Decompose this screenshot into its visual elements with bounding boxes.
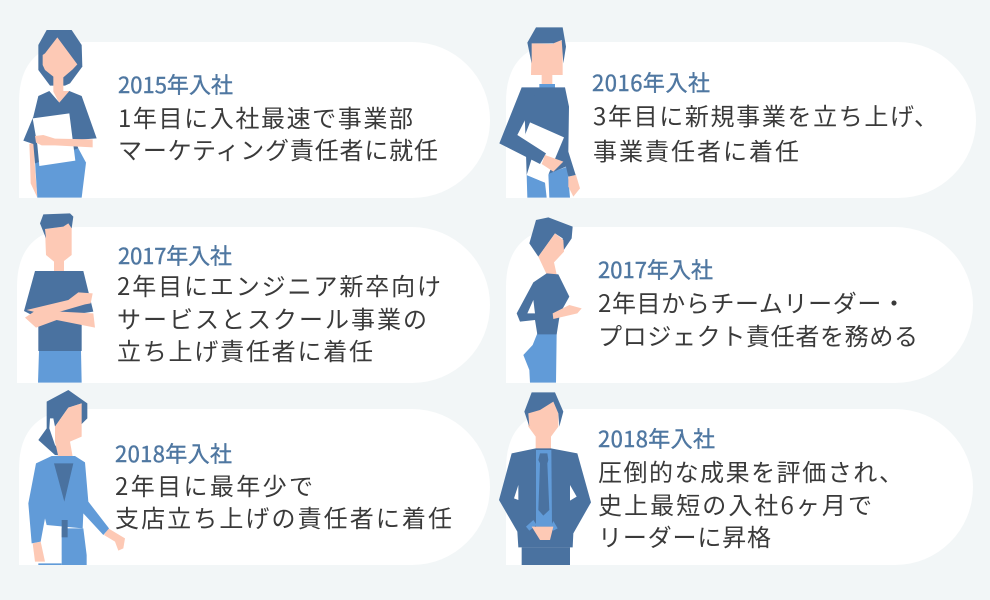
- text block: promotion achievement: [598, 453, 903, 553]
- text block: promotion achievement: リーダーに昇格: [598, 518, 771, 553]
- heading: 2016年入社: 2016年入社: [592, 66, 710, 98]
- text block: 2016 achievement: [593, 97, 938, 167]
- heading: 2015年入社: 2015年入社: [118, 68, 233, 100]
- text block: 2015 achievement: マーケティング責任者に就任: [118, 131, 438, 166]
- panel: 2017 hire, team leader: [506, 217, 973, 383]
- icon: woman in blazer: [28, 390, 125, 565]
- text block: 2015 achievement: 1年目に入社最速で事業部: [118, 99, 413, 134]
- icon: woman holding paper: [23, 30, 97, 198]
- text block: team leader achievement: プロジェクト責任者を務める: [598, 317, 918, 352]
- text block: 2015 achievement: [118, 99, 438, 166]
- text block: 2016 achievement: 事業責任者に着任: [593, 132, 799, 167]
- text block: engineer services achievement: 2年目にエンジニア新卒向け: [117, 267, 441, 302]
- icon: man walking in profile: [517, 217, 582, 383]
- text block: team leader achievement: [598, 284, 918, 352]
- text block: team leader achievement: 2年目からチームリーダー・: [598, 284, 906, 319]
- text block: engineer services achievement: サービスとスクール事業の: [117, 300, 427, 335]
- text block: promotion achievement: 圧倒的な成果を評価され、: [598, 453, 903, 488]
- heading: 2018年入社: 2018年入社: [115, 437, 232, 469]
- heading: 2017年入社: 2017年入社: [598, 253, 713, 285]
- icon: man with crossed arms: [24, 213, 95, 383]
- text block: engineer services achievement: [117, 267, 441, 367]
- icon: man carrying paper: [499, 27, 580, 198]
- panel: 2018 hire, branch launch: [19, 390, 490, 565]
- text block: promotion achievement: 史上最短の入社6ヶ月で: [598, 486, 872, 521]
- heading: 2018年入社: 2018年入社: [598, 422, 715, 454]
- panel: 2017 hire, engineer services: [17, 213, 490, 383]
- panel: 2016 hire: [499, 27, 976, 198]
- panel: 2018 hire, promotion: [499, 392, 973, 565]
- heading: 2017年入社: 2017年入社: [118, 239, 232, 271]
- text block: branch launch achievement: 支店立ち上げの責任者に着任: [115, 499, 452, 534]
- text block: engineer services achievement: 立ち上げ責任者に着任: [117, 332, 373, 367]
- icon: man in suit and tie: [499, 392, 591, 565]
- panel: 2015 hire: [19, 30, 490, 198]
- text block: branch launch achievement: 2年目に最年少で: [115, 467, 313, 502]
- text block: 2016 achievement: 3年目に新規事業を立ち上げ、: [593, 97, 938, 132]
- text block: branch launch achievement: [115, 467, 452, 534]
